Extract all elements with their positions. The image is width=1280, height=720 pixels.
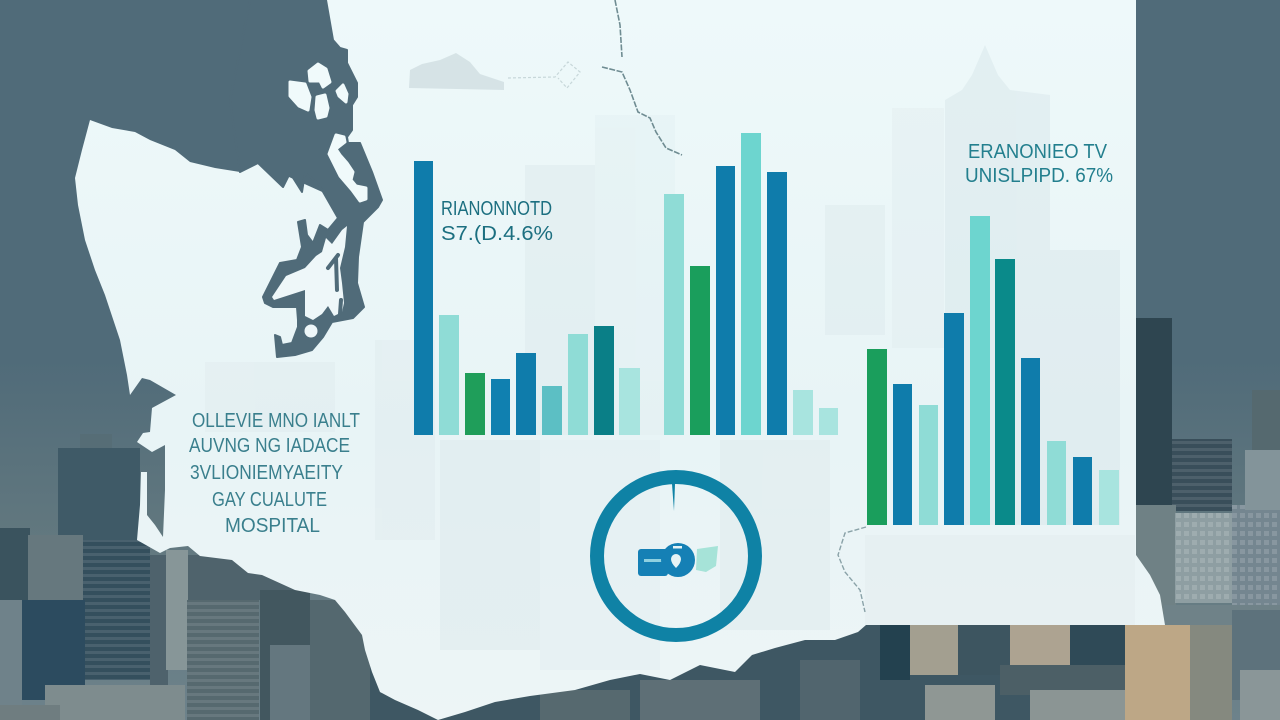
label: right chart: ERANONIEO TV: [968, 141, 1108, 163]
map: county border line north: [602, 0, 682, 155]
text block: hospital note: 3VLIONIEMYAEITY: [190, 462, 343, 484]
map: islands: [290, 64, 366, 201]
map: faint skyline inside the state: [205, 45, 1135, 670]
label: left chart: RIANONNOTD: [441, 198, 552, 220]
label: left chart: [441, 198, 553, 245]
text block: hospital note: GAY CUALUTE: [212, 489, 327, 511]
text block: hospital note: OLLEVIE MNO IANLT: [192, 410, 360, 432]
map: small island: [304, 324, 318, 338]
icon: ring with hospital glyph: [597, 477, 755, 635]
chart: left bars: [414, 161, 640, 435]
text block: hospital note: MOSPITAL: [225, 515, 320, 537]
chart: middle bars: [664, 133, 838, 435]
background: city skyline right: [1136, 318, 1280, 720]
map: county border line east: [838, 527, 866, 612]
label: right chart: [965, 141, 1113, 187]
map: Kitsap peninsula: [272, 226, 347, 320]
text block: hospital note: [189, 410, 360, 537]
chart: right bars: [867, 216, 1119, 525]
map: Puget Sound water: [230, 0, 382, 357]
label: right chart: UNISLPIPD. 67%: [965, 165, 1113, 187]
text block: hospital note: AUVNG NG IADACE: [189, 435, 350, 457]
background: city skyline bottom: [370, 625, 1232, 720]
map: south sound inlets: [328, 255, 341, 314]
logo: faint top mark: [409, 53, 580, 90]
label: left chart: S7.(D.4.6%: [441, 223, 553, 245]
background: city skyline left: [0, 434, 380, 720]
